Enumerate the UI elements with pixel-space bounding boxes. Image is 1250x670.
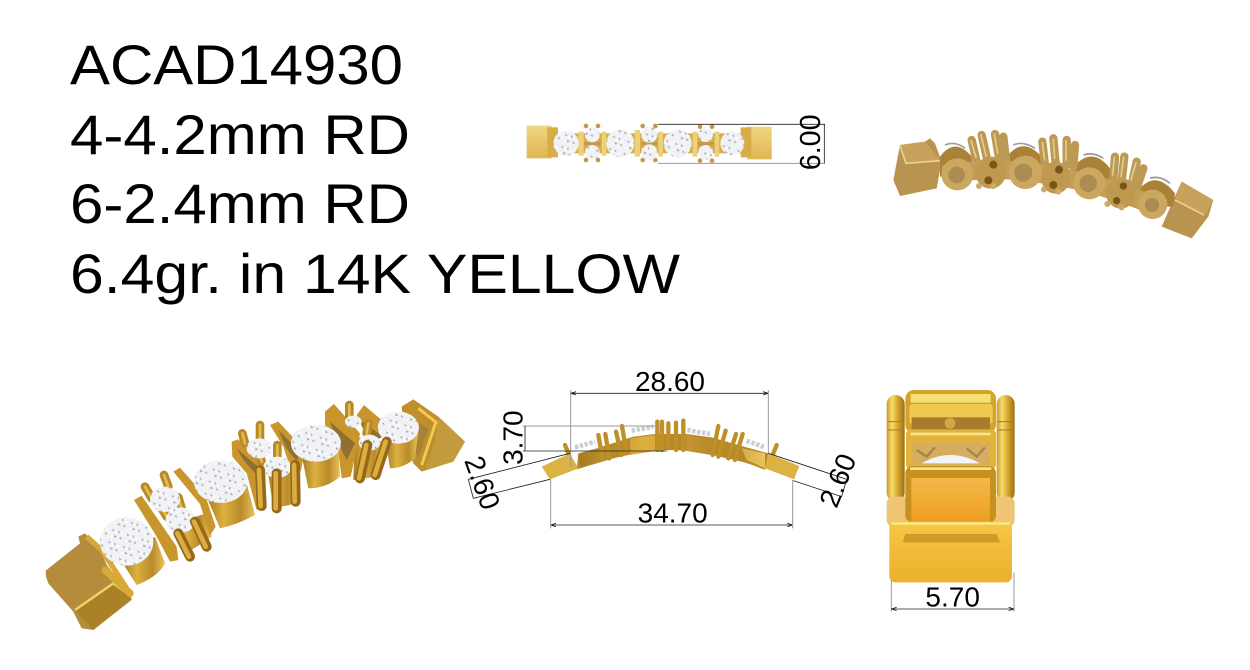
top view of the ring with width dimension <box>527 114 827 170</box>
diamonds <box>100 412 419 566</box>
perspective view of the ring with diamonds <box>46 399 465 630</box>
side view of the ring with dimensions: 34.70 <box>638 498 708 529</box>
connecting base <box>943 170 1153 205</box>
top view of the ring with width dimension: 6.00 <box>795 114 827 170</box>
front prongs <box>105 442 387 593</box>
right end block <box>398 399 465 472</box>
side view of the ring with dimensions <box>458 366 862 529</box>
title: product specifications <box>70 33 680 305</box>
end view of the ring with width dimension: 5.70 <box>925 582 980 613</box>
back prongs <box>972 134 1143 188</box>
stone seats behind the discs <box>940 146 1175 207</box>
side view gold body <box>542 421 799 479</box>
side view of the ring with dimensions: 3.70 <box>498 410 529 465</box>
title: product specifications: 4-4.2mm RD <box>70 103 410 166</box>
title: product specifications: 6.4gr. in 14K YELLOW <box>70 242 680 305</box>
side view of the ring with dimensions: 2.60 <box>813 449 862 511</box>
side view of the ring with dimensions: 2.60 <box>458 452 506 514</box>
gold cups under stones <box>122 432 418 585</box>
back view of the ring <box>893 134 1213 238</box>
left end block <box>46 533 132 630</box>
side view of the ring with dimensions: 28.60 <box>635 366 705 397</box>
title: product specifications: ACAD14930 <box>70 33 403 96</box>
end view of the ring with width dimension <box>887 390 1015 613</box>
back walls and prongs <box>134 404 393 562</box>
title: product specifications: 6-2.4mm RD <box>70 172 410 235</box>
